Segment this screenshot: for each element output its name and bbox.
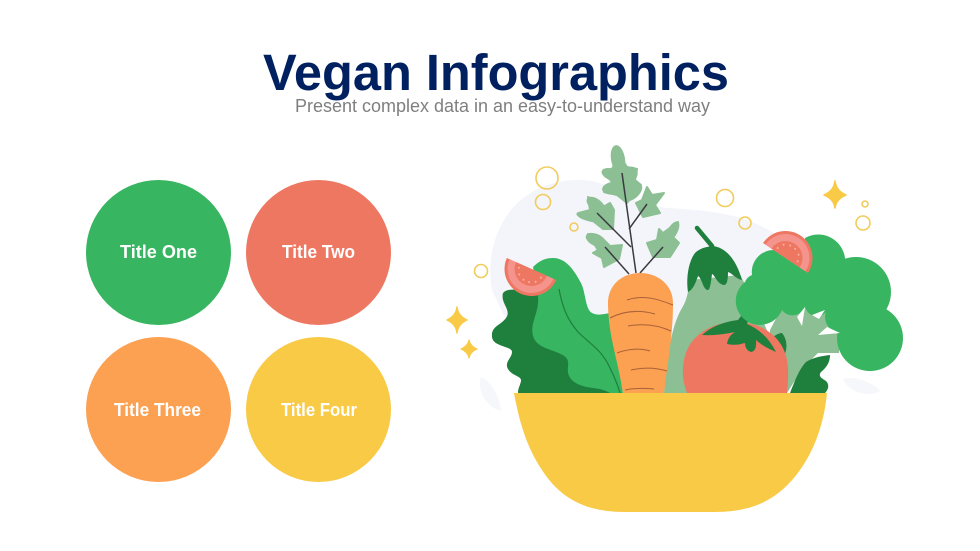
subtitle: Present complex data in an easy-to-understand way [295, 96, 710, 116]
circle: title two [246, 180, 391, 325]
eggplant body [664, 275, 787, 393]
broccoli head [736, 235, 903, 371]
carrot stems [597, 173, 663, 274]
carrot lines [610, 297, 673, 390]
dark lettuce leaf [492, 285, 612, 393]
leaf vein [559, 289, 620, 393]
dark leaf under broccoli [790, 355, 830, 393]
eggplant cap [687, 228, 742, 292]
tomato sepals [702, 307, 776, 352]
green lettuce leaf [532, 258, 623, 393]
circle: title three [86, 337, 231, 482]
circle: title three: Title Three [114, 400, 201, 420]
broccoli stem [770, 303, 840, 393]
small dark leaf behind tomato [773, 333, 786, 354]
background blob [490, 180, 785, 350]
tomato slice left [496, 258, 556, 305]
illustration: vegetable bowl [447, 144, 903, 512]
circle: title two: Title Two [282, 242, 355, 262]
tomato slice right [763, 221, 823, 273]
tomato [683, 322, 788, 393]
title: Vegan Infographics [263, 44, 729, 101]
circle: title one [86, 180, 231, 325]
sparkles [447, 181, 846, 358]
faint leaf right [843, 378, 880, 394]
bowl [514, 393, 827, 512]
carrot tops [575, 144, 682, 267]
circle: title one: Title One [120, 242, 197, 262]
faint leaf left [480, 377, 501, 411]
circle: title four [246, 337, 391, 482]
decorative rings [474, 167, 870, 278]
broccoli stem gaps [797, 307, 840, 335]
carrot [608, 273, 673, 393]
circle: title four: Title Four [281, 400, 357, 420]
